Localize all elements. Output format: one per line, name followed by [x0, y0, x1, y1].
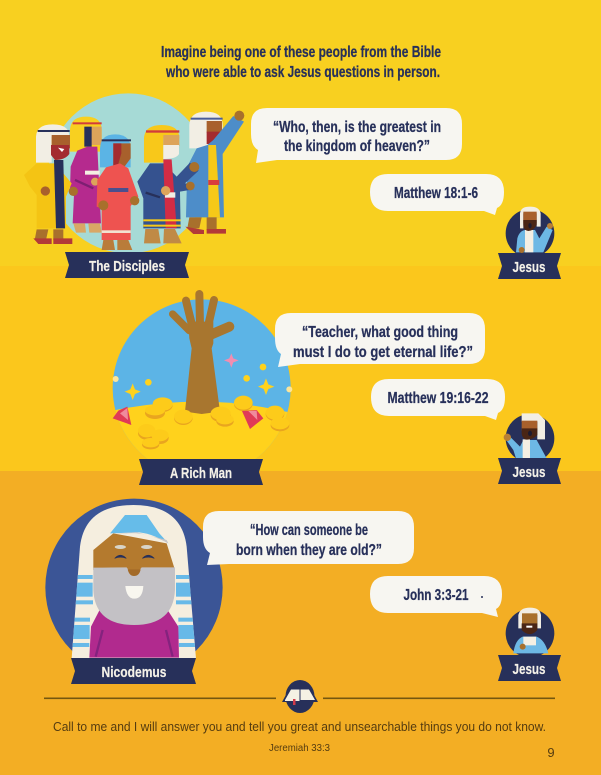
speech bubble: born when old: born when they are old?” — [236, 542, 382, 559]
speech bubble: greatest question — [251, 108, 462, 163]
banner: Jesus one — [498, 253, 561, 279]
icon: open bible — [282, 680, 318, 713]
scripture reference: Jeremiah 33:3 — [269, 743, 330, 754]
speech bubble: John 3 — [370, 576, 502, 617]
speech bubble: greatest question: the kingdom of heaven?” — [284, 138, 430, 155]
cap — [110, 515, 168, 543]
gold coins — [138, 396, 289, 449]
banner: Jesus three: Jesus — [512, 661, 546, 678]
background: bottom orange band — [0, 471, 601, 775]
heading: who were able to ask Jesus questions in person. — [165, 64, 440, 81]
page number: 9 — [547, 745, 555, 760]
illustration: the disciples — [24, 93, 244, 253]
disciple 2: purple robe — [69, 117, 102, 233]
disciple 5: raised hand — [185, 111, 244, 234]
disciple 1: yellow robe — [24, 124, 72, 244]
disciple 3: red robe — [97, 134, 139, 250]
illustration: rich man — [112, 290, 292, 459]
background: top yellow band — [0, 0, 601, 267]
robe — [89, 606, 179, 658]
beard — [93, 567, 175, 625]
footer rule left — [44, 698, 276, 699]
eyebrows and eyes — [115, 545, 126, 549]
heading — [161, 44, 441, 81]
raised arm and hand — [173, 294, 229, 414]
banner: Jesus three — [498, 655, 561, 681]
icon: Jesus three — [506, 608, 554, 658]
banner: Nicodemus: Nicodemus — [102, 664, 166, 681]
speech bubble: Matthew 18 — [370, 174, 504, 215]
speech bubble: greatest question: “Who, then, is the greatest in — [273, 119, 441, 136]
speech bubble: Matthew 18: Matthew 18:1-6 — [394, 185, 478, 202]
speech bubble: Matthew 19 — [371, 379, 505, 420]
banner: The Disciples — [65, 252, 189, 278]
disciple 4: navy robe — [137, 125, 199, 243]
tallit stripes — [70, 575, 197, 647]
footer rule right — [323, 698, 555, 699]
speech bubble: eternal life question: “Teacher, what good thing — [302, 324, 458, 341]
speech bubble: born when old: “How can someone be — [250, 522, 368, 539]
banner: Jesus two: Jesus — [512, 464, 546, 481]
head cloth — [72, 505, 196, 658]
speech bubble: born when old — [203, 511, 414, 565]
banner: Jesus two — [498, 458, 561, 484]
background: middle yellow band — [0, 266, 601, 472]
banner: Nicodemus — [71, 658, 196, 684]
red gems — [113, 407, 131, 425]
banner: The Disciples: The Disciples — [89, 258, 165, 275]
face — [93, 533, 175, 570]
banner: A Rich Man: A Rich Man — [170, 465, 232, 482]
heading: Imagine being one of these people from the Bible — [161, 44, 441, 61]
speech bubble: eternal life question: must I do to get eternal life?” — [293, 344, 473, 361]
banner: A Rich Man — [139, 459, 263, 485]
speech bubble: John 3: John 3:3-21 — [404, 587, 469, 604]
speech bubble: eternal life question — [275, 313, 485, 367]
mouth — [125, 586, 143, 599]
scripture verse: Call to me and I will answer you and tell you great and unsearchable things you do not know. — [53, 720, 546, 734]
banner: Jesus one: Jesus — [512, 259, 546, 276]
illustration: Nicodemus — [45, 499, 223, 676]
icon: Jesus one — [506, 207, 554, 258]
sparkles — [125, 383, 141, 400]
icon: Jesus two — [504, 413, 554, 463]
speech bubble: Matthew 19: Matthew 19:16-22 — [388, 390, 488, 407]
